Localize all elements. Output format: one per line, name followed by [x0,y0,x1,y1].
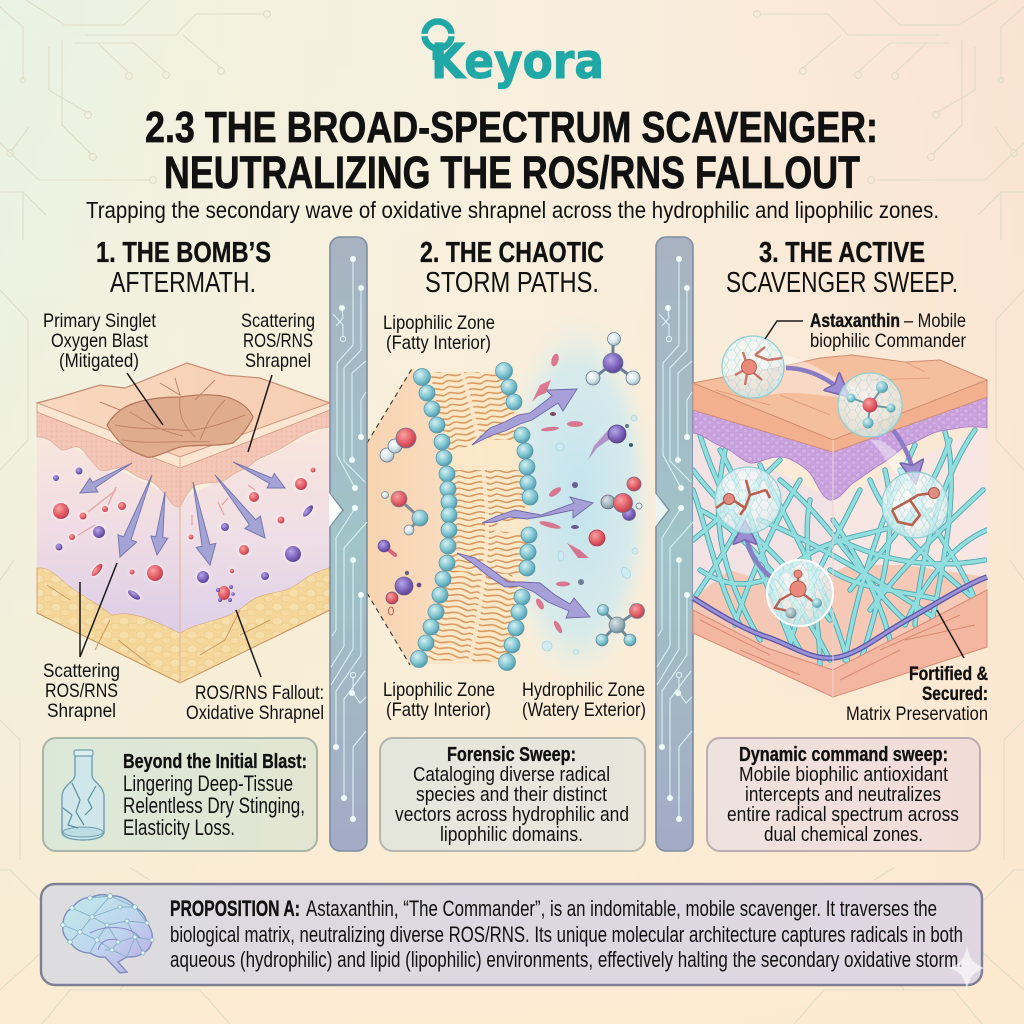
molecule: purple tail radical [588,424,633,460]
label: astaxanthin: biophilic Commander [810,330,966,352]
sphere 1 [722,336,784,398]
panel: dynamic command sweep: Dynamic command sweep: [739,743,948,766]
label: fortified and secured [846,663,988,725]
panel: dynamic command sweep: dual chemical zones. [764,823,923,846]
molecule: red cluster [601,477,642,520]
panel: forensic sweep: Cataloging diverse radical [413,763,610,786]
title: NEUTRALIZING THE ROS/RNS FALLOUT [164,147,860,198]
label: fortified and secured: Matrix Preservation [846,703,988,725]
cube edge [179,457,181,683]
dermis right face [180,425,330,633]
epidermis band [37,410,330,507]
label: scattering shrapnel top [241,310,315,372]
label: lipophilic zone bottom [383,679,495,721]
panel: dynamic command sweep: entire radical spectrum across [727,803,959,826]
top surface creases [715,362,930,415]
bilayer cream core [422,372,530,664]
arrow 2 [118,475,152,557]
label: hydrophilic zone: (Watery Exterior) [522,699,646,721]
hydrophilic water glow [500,310,656,690]
text: beyond the initial blast [123,750,307,840]
blast crater [107,395,253,457]
arrow 4 [193,482,216,565]
molecule: lipid radical [386,571,421,615]
panel: forensic sweep: lipophilic domains. [440,823,583,846]
label: lipophilic zone bottom: Lipophilic Zone [383,679,495,701]
leader: fallout [236,610,261,677]
panel: scavenger sweep cube [693,336,987,697]
heading: column 1: AFTERMATH. [110,267,256,299]
leader: blast [127,373,163,425]
text: proposition: PROPOSITION A: [170,896,300,921]
label: fortified and secured: Fortified & [909,663,988,685]
panel: beyond the initial blast [43,738,317,851]
right phospholipid heads [496,362,538,670]
arrow 5 [215,475,265,538]
label: lipophilic zone top: Lipophilic Zone [383,312,495,334]
lipid tails middle [448,470,528,575]
molecule: lipid oxide [380,428,416,462]
molecule: four-arm radical [596,604,644,646]
sweep trail clouds [770,355,925,490]
label: scattering shrapnel top: ROS/RNS [243,330,313,352]
icon: cracked bottle [62,750,104,840]
heading: column 3 [726,237,958,299]
sweep arrow 2 [893,430,915,480]
panel: forensic sweep: species and their distinct [416,783,607,806]
icon: neural brain [61,894,154,973]
heading: column 3: SCAVENGER SWEEP. [726,267,958,299]
muscle striations [700,615,975,697]
leader: fortified [937,610,964,658]
molecule: lipid hydroxyl [382,491,428,535]
purple vessel [693,577,987,658]
orange edge strip [693,380,987,452]
text: beyond the initial blast: Beyond the Initial Blast: [123,750,307,773]
jagged storm arrow 2 [482,497,593,523]
collagen fibres highlight [693,430,987,670]
label: scattering shrapnel top: Scattering [241,310,315,332]
logo wordmark: Keyora [431,34,604,90]
label: astaxanthin: Astaxanthin [810,310,900,332]
label: primary singlet oxygen blast: (Mitigated) [59,350,139,372]
fat cracks [37,585,330,683]
label: fortified and secured: Secured: [922,683,988,705]
logo key ring [421,22,456,60]
crater creases [100,378,245,442]
bottom muscle band [693,590,987,697]
jagged storm arrow 1 [472,389,577,445]
text: beyond the initial blast: Elasticity Loss. [123,815,235,840]
panel: proposition A [41,884,982,985]
oxidised cluster [216,585,235,602]
lipid tails lower [425,570,522,662]
panel: dynamic command sweep: Mobile biophilic antioxidant [739,763,948,786]
panel: dynamic command sweep [707,738,980,851]
label: fallout: Oxidative Shrapnel [186,702,324,724]
watermark sparkle [949,945,985,991]
label: fallout [186,682,324,724]
lipid tails upper [430,372,515,455]
bilayer gap [462,372,487,662]
background circuit traces left [0,0,270,1024]
label: scattering shrapnel bottom: ROS/RNS [45,680,118,702]
jagged storm arrow 3 [457,553,590,618]
cube centre edge [832,440,834,697]
dark debris dots [550,412,584,585]
molecule: amine top right [586,332,640,385]
heading: column 2: STORM PATHS. [425,267,599,299]
storm shards [532,353,589,634]
lower pink tissue [693,565,987,697]
lipophilic interior [367,368,449,665]
panel: dynamic command sweep: intercepts and neutralizes [745,783,941,806]
arrow 3 [151,492,168,555]
panel: forensic sweep: Forensic Sweep: [447,743,576,766]
heading: column 1: 1. THE BOMB’S [96,237,271,269]
zoom dashed lines [367,367,413,665]
dermis left face [37,430,180,633]
title: 2.3 THE BROAD-SPECTRUM SCAVENGER: [145,103,878,152]
logo: Keyora [421,22,604,90]
sphere 2 [838,373,902,437]
panel: forensic sweep: vectors across hydrophilic and [395,803,629,826]
heading: column 2: 2. THE CHAOTIC [420,237,604,269]
divider 2 [655,237,693,851]
epidermis purple layer [693,397,987,500]
purple vessel highlight [693,577,987,658]
leader: astaxanthin [765,321,803,339]
label: scattering shrapnel top: Shrapnel [245,350,311,372]
panel: forensic sweep [380,738,645,851]
label: primary singlet oxygen blast: Oxygen Blast [51,330,148,352]
divider 1 [329,237,367,851]
label: primary singlet oxygen blast: Primary Singlet [43,310,156,332]
heading: column 1 [96,237,271,299]
label: hydrophilic zone: Hydrophilic Zone [522,679,645,701]
purple radicals [53,468,315,601]
top surface [693,355,987,440]
leader: shrapnel top [248,375,272,452]
panel: skin blast cube [37,363,330,683]
arrow 6 [233,462,285,488]
shrapnel streaks [78,485,255,535]
red radicals [53,468,316,581]
label: lipophilic zone top [383,312,495,354]
label: scattering shrapnel bottom: Scattering [43,660,120,682]
heading: column 3: 3. THE ACTIVE [759,237,925,269]
sphere 5 [767,560,833,626]
sphere 4 [715,467,781,533]
label: scattering shrapnel bottom [43,660,120,722]
interior left [693,430,833,697]
leader: shrapnel bottom [80,563,117,657]
top surface [37,363,330,457]
fat layer [37,567,330,683]
molecule: lipid peroxyl [378,540,395,555]
label: primary singlet oxygen blast [43,310,156,372]
text: proposition [170,896,963,972]
arrow 1 [80,463,132,493]
background circuit traces right [754,0,1024,1024]
heading: column 2 [420,237,604,299]
label: lipophilic zone top: (Fatty Interior) [386,332,491,354]
label: scattering shrapnel bottom: Shrapnel [47,700,116,722]
label: astaxanthin: – Mobile [904,310,966,332]
label: astaxanthin [810,310,966,352]
pale edge strip [37,403,330,468]
left phospholipid heads [410,368,457,668]
text: beyond the initial blast: Relentless Dry Stinging, [123,793,305,818]
label: fallout: ROS/RNS Fallout: [195,682,324,704]
label: lipophilic zone bottom: (Fatty Interior) [386,699,491,721]
collagen fibres outline [693,430,987,670]
subtitle: Trapping the secondary wave of oxidative shrapnel across the hydrophilic and lipophilic zones. [86,197,939,223]
interior right [833,425,987,697]
text: beyond the initial blast: Lingering Deep-Tissue [123,771,293,796]
sweep arrow 3 [745,525,772,578]
water droplets [542,415,638,654]
sphere 3 [882,472,948,538]
title [145,103,878,198]
molecule: lone oxygen radical [589,530,605,546]
label: hydrophilic zone [522,679,646,721]
panel: membrane storm [367,310,656,690]
sweep arrow 1 [786,368,846,394]
